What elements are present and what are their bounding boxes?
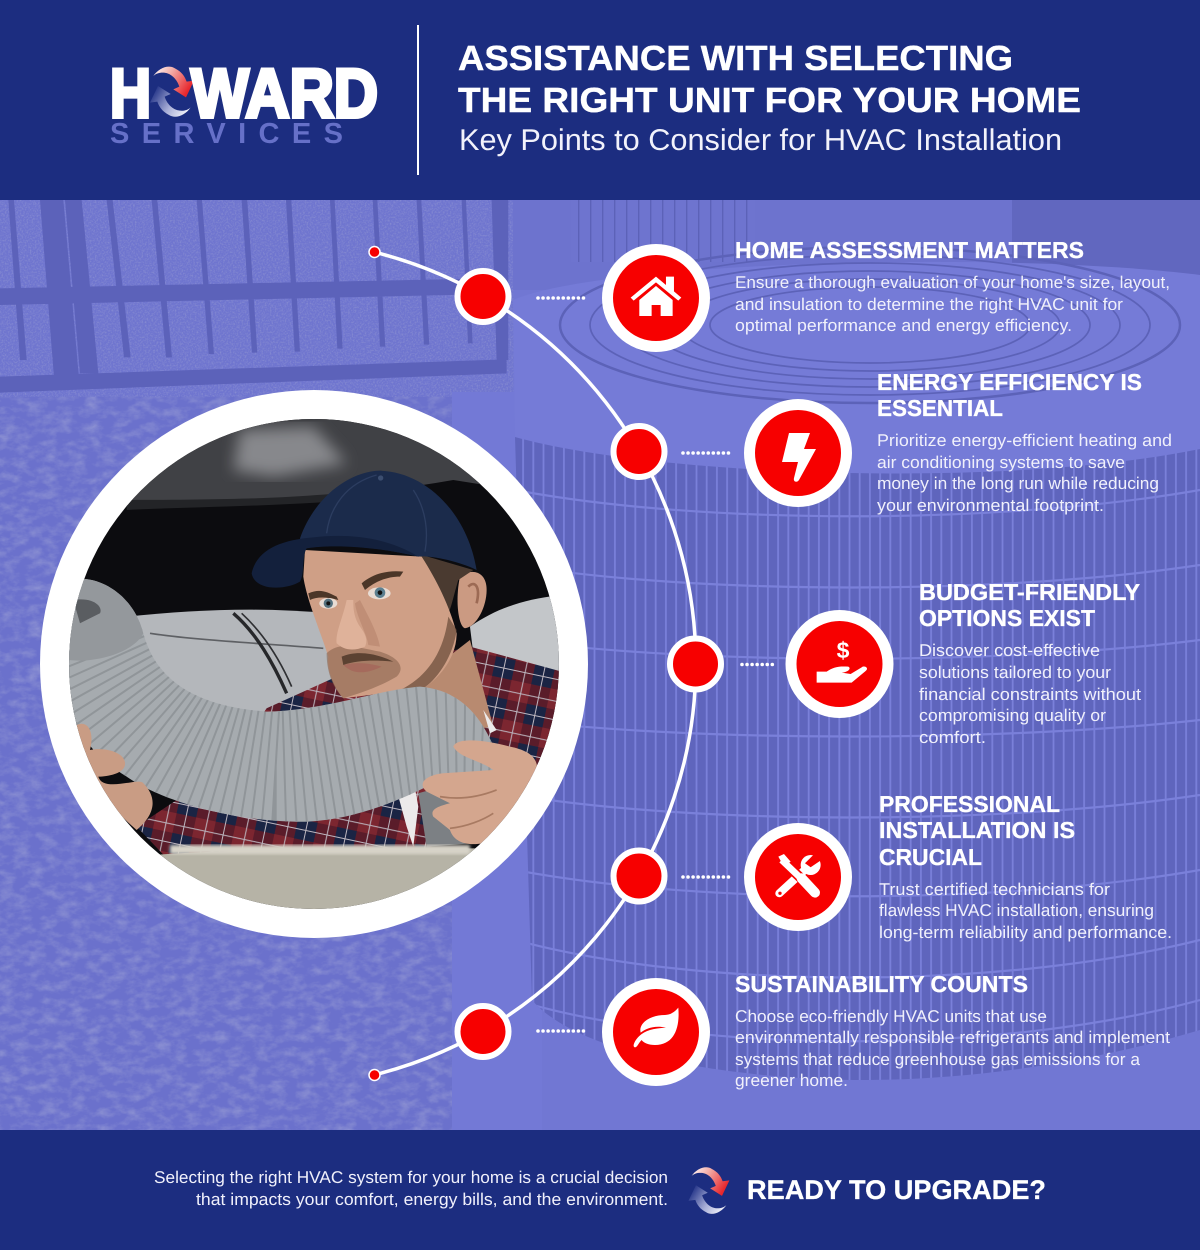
title: [458, 39, 1081, 157]
node 5: [458, 1006, 508, 1057]
body 1: optimal performance and energy efficiency.: [735, 316, 1072, 335]
icon: home: [608, 250, 704, 346]
footer text: [154, 1168, 668, 1209]
unit wire grille: [500, 420, 1200, 1100]
icon: hand with dollar: $: [837, 637, 850, 663]
body 3: Discover cost-effective: [919, 641, 1100, 660]
heading 2: ENERGY EFFICIENCY IS: [877, 369, 1142, 395]
body 5: environmentally responsible refrigerants and implement: [735, 1028, 1170, 1047]
item 3: budget: [670, 579, 1141, 747]
pad and housing column: [452, 392, 542, 1130]
heading 2: ESSENTIAL: [877, 395, 1003, 421]
ledge: [160, 848, 476, 909]
item 4: professional installation: [614, 791, 1172, 942]
background: purple AC unit photo: [0, 200, 1200, 1130]
heading 4: INSTALLATION IS: [879, 817, 1075, 843]
neck and undershirt: [424, 640, 493, 728]
title: Key Points to Consider for HVAC Installation: [459, 124, 1062, 157]
body 1: [735, 273, 1170, 335]
node 3: [670, 638, 721, 690]
footer call to action: READY TO UPGRADE?: [747, 1175, 1046, 1205]
hands: [423, 740, 537, 844]
heading 3: [919, 579, 1140, 631]
heading 3: BUDGET-FRIENDLY: [919, 579, 1140, 605]
heading 5: SUSTAINABILITY COUNTS: [735, 971, 1028, 997]
heading 1: HOME ASSESSMENT MATTERS: [735, 237, 1084, 263]
header band: [0, 0, 1200, 200]
body 3: solutions tailored to your: [919, 663, 1111, 682]
body 2: air conditioning systems to save: [877, 453, 1125, 472]
header divider: [417, 25, 419, 175]
footer icon: swirl arrows: [688, 1167, 729, 1214]
body 5: [735, 1007, 1170, 1090]
logo: Howard Services: H: [110, 55, 151, 132]
node 1: [458, 271, 508, 322]
icon: lightning bolt: [750, 404, 846, 502]
body 1: Ensure a thorough evaluation of your home's size, layout,: [735, 273, 1170, 292]
heading 4: CRUCIAL: [879, 844, 982, 870]
arc end dot top: [369, 246, 380, 258]
item 2: energy efficiency: [614, 369, 1172, 515]
icon: leaf: [608, 984, 704, 1080]
body 4: Trust certified technicians for: [879, 880, 1110, 899]
background units behind: [513, 200, 1200, 295]
body 5: Choose eco-friendly HVAC units that use: [735, 1007, 1047, 1026]
heading 4: [879, 791, 1075, 870]
technician photo: [40, 390, 588, 938]
dotted connector 3: [742, 663, 773, 666]
body 3: comfort.: [919, 728, 986, 747]
body 4: long-term reliability and performance.: [879, 923, 1172, 942]
dotted connector 2: [683, 451, 731, 455]
silver insulated duct: [136, 610, 332, 712]
icon: wrench and screwdriver: [750, 828, 846, 926]
footer band: [0, 1130, 1200, 1250]
body 3: financial constraints without: [919, 685, 1141, 704]
body 2: Prioritize energy-efficient heating and: [877, 431, 1172, 450]
flexible duct: [68, 579, 502, 822]
iron fence: [0, 200, 513, 397]
logo swirl arrows: [150, 67, 194, 117]
title: ASSISTANCE WITH SELECTING: [458, 39, 1013, 78]
body 4: [879, 880, 1172, 942]
ear: [458, 572, 487, 628]
body 2: your environmental footprint.: [877, 496, 1104, 515]
item 5: sustainability: [458, 971, 1170, 1090]
body 2: money in the long run while reducing: [877, 474, 1159, 493]
body 5: systems that reduce greenhouse gas emissions for a: [735, 1050, 1141, 1069]
dotted connector 1: [538, 296, 586, 300]
heading 2: [877, 369, 1142, 421]
arc end dot bottom: [369, 1070, 380, 1080]
eyes and brows: [308, 571, 403, 600]
plaid shirt: [137, 647, 580, 862]
body 1: and insulation to determine the right HVAC unit for: [735, 295, 1123, 314]
heading 4: PROFESSIONAL: [879, 791, 1060, 817]
logo: Howard Services: SERVICES: [110, 118, 343, 150]
face: [303, 550, 457, 698]
logo: Howard Services: [110, 55, 378, 150]
cap: [300, 471, 477, 570]
footer text: Selecting the right HVAC system for your home is a crucial decision: [154, 1168, 668, 1187]
heading 3: OPTIONS EXIST: [919, 605, 1095, 631]
footer text: that impacts your comfort, energy bills, and the environment.: [196, 1190, 668, 1209]
grass lawn: [0, 392, 452, 1130]
body 4: flawless HVAC installation, ensuring: [879, 901, 1154, 920]
item 1: home assessment: [458, 237, 1170, 346]
connector arc: [374, 252, 696, 1075]
hair: [415, 556, 473, 610]
logo: Howard Services: WARD: [191, 55, 378, 132]
nose: [336, 600, 366, 650]
icon: hand with dollar: [791, 616, 888, 712]
unit lid: [513, 247, 1200, 473]
body 3: [919, 641, 1141, 747]
dotted connector 4: [683, 875, 731, 879]
node 4: [614, 850, 664, 902]
body 3: compromising quality or: [919, 706, 1106, 725]
body 5: greener home.: [735, 1071, 848, 1090]
body 2: [877, 431, 1172, 515]
dotted connector 5: [538, 1029, 586, 1033]
ceiling duct: [130, 419, 480, 502]
node 2: [614, 426, 664, 477]
title: THE RIGHT UNIT FOR YOUR HOME: [458, 81, 1081, 120]
